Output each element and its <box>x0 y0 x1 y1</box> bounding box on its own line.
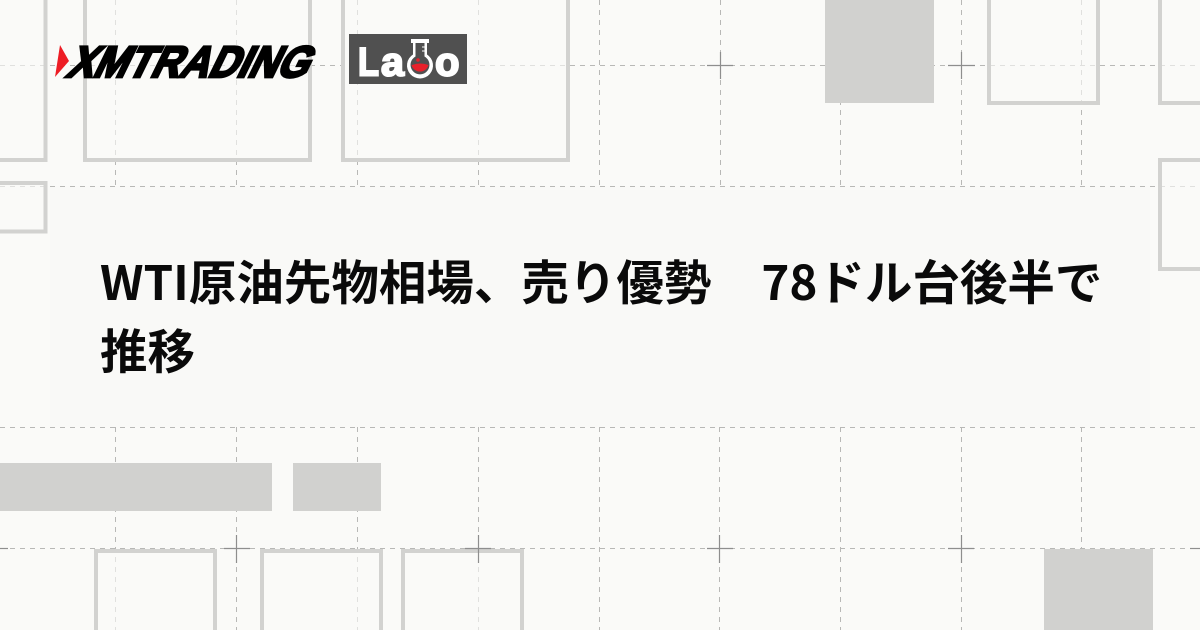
filled block: top <box>825 0 934 103</box>
outlined square: top right <box>989 0 1098 103</box>
outlined square: bottom 3 <box>403 551 522 630</box>
icon: flask <box>407 39 433 78</box>
outlined square: behind XM logo <box>85 0 310 160</box>
title: WTI原油先物相場、売り優勢 78ドル台後半で <box>100 245 1102 314</box>
outlined square: small left <box>0 183 46 232</box>
wordmark: XMTRADING <box>60 37 325 86</box>
logo letter a: a <box>381 40 405 84</box>
icon: red arrow <box>55 45 69 77</box>
outlined square: bottom 1 <box>96 551 215 630</box>
title: 推移 <box>100 314 195 383</box>
title panel <box>50 186 1150 427</box>
logo letter L: L <box>358 40 379 84</box>
outlined square: right edge <box>1160 160 1200 269</box>
title <box>100 245 1102 383</box>
outlined square: top left edge <box>0 0 46 160</box>
outlined square: behind Lab logo <box>343 0 568 160</box>
logo: Lab <box>349 34 467 84</box>
filled block: long bar <box>0 463 272 511</box>
logo: XMTRADING <box>55 37 325 86</box>
filled block: short bar <box>293 463 381 511</box>
outlined square: top right edge <box>1160 0 1200 103</box>
filled block: bottom right <box>1044 549 1153 630</box>
logo letter o: o <box>435 40 460 84</box>
logo background <box>349 34 467 84</box>
outlined square: bottom 2 <box>262 551 381 630</box>
